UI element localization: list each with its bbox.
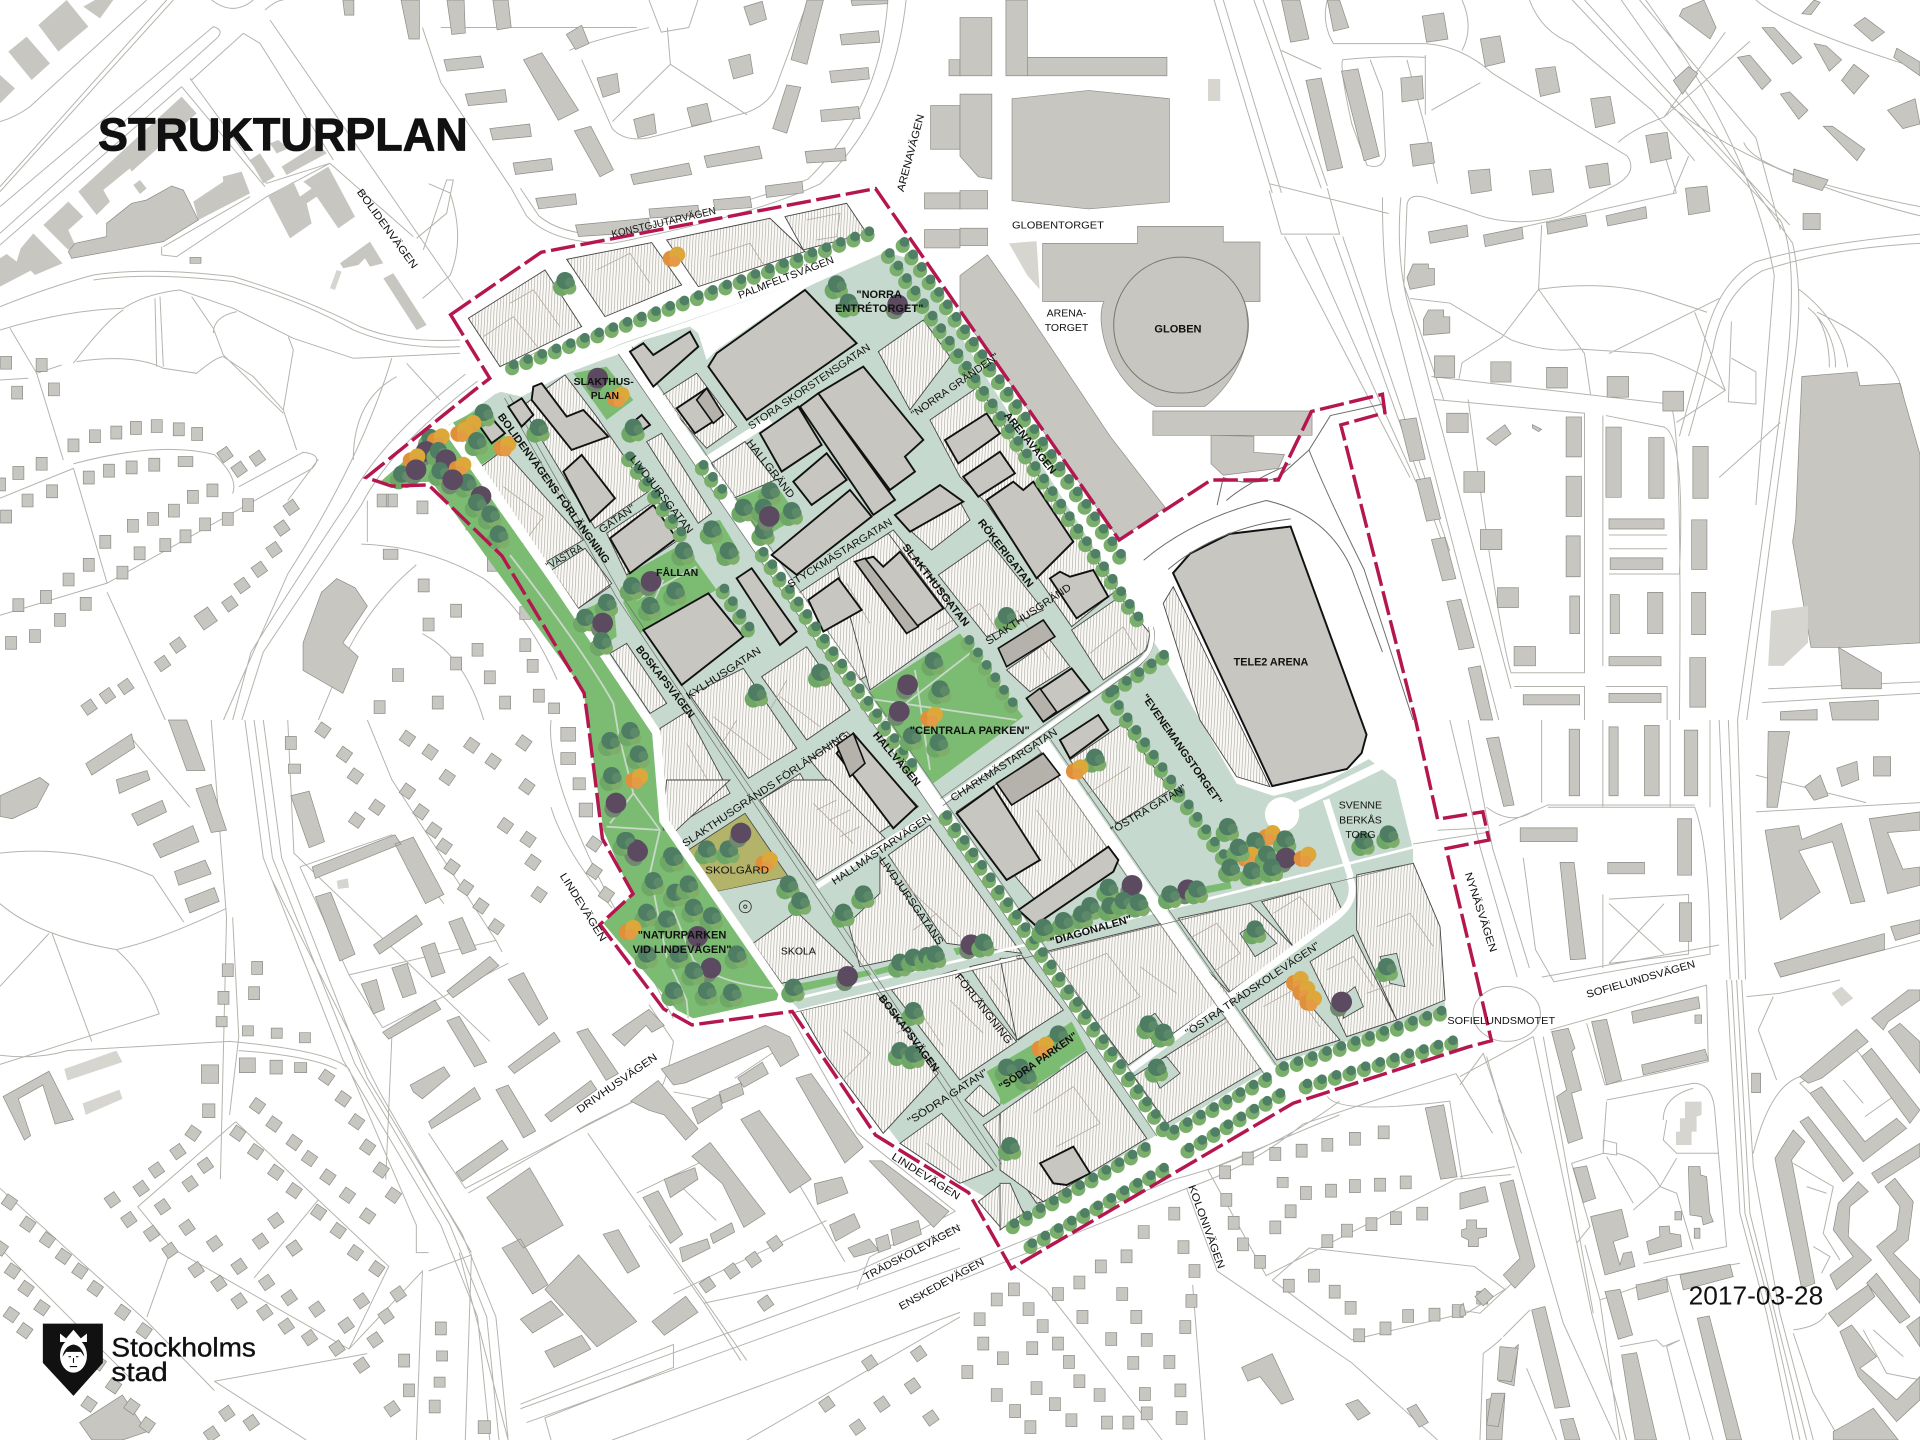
label: Norra Gränden: "NORRA GRÄNDEN" [909,351,1001,420]
label: Rökerigatan: RÖKERIGATAN [975,516,1036,590]
label: Östra Gatan: "ÖSTRA GATAN" [1109,782,1189,837]
label: Norra Entrétorget: "NORRA [856,289,902,301]
icon: city shield [43,1324,103,1396]
buildings: north-east quarter [960,0,1920,720]
label: Arenavägen: ARENAVÄGEN [1001,409,1059,477]
parks [378,367,1232,1105]
label: Kylhusgatan: KYLHUSGATAN [684,645,763,702]
label: Styckmästargatan: STYCKMÄSTARGATAN [785,516,895,591]
label: Slakthusgatan: SLAKTHUSGATAN [899,542,972,629]
label: Västra: "VÄSTRA [544,542,585,572]
label: Skola: SKOLA [781,945,816,957]
label: Naturparken vid Lindevägen: VID LINDEVÄGEN" [633,943,731,956]
label: Hallvägen: HALLVÄGEN [870,729,923,789]
label: Hallgränd: HALLGRÄND [744,437,797,501]
buildings: south-west quarter [0,720,949,1440]
logo: Stockholms stad [43,1324,256,1396]
buildings: bottom-right corner [1460,987,1920,1440]
label: Arenatorget: ARENA- [1047,307,1087,319]
label: Nynäsvägen: NYNÄSVÄGEN [1462,871,1499,954]
school yard [688,813,788,892]
label: Sofielundsmotet: SOFIELUNDSMOTET [1447,1015,1556,1027]
label: Sofielundsvägen: SOFIELUNDSVÄGEN [1585,958,1697,1001]
label: Norra Entrétorget: ENTRÉTORGET" [835,302,923,315]
label: Slakthusgränd: SLAKTHUSGRÄND [984,581,1074,648]
logo: Stockholms stad: stad [111,1357,168,1387]
tree avenues [512,231,1453,1254]
arena approach road lines [1144,404,1413,720]
label: Livdjursgatans: LIVDJURSGATANS [876,855,946,947]
label: Lindevägen west: LINDEVÄGEN [557,871,609,944]
park trees [390,247,1400,1161]
label: Diagonalen: "DIAGONALEN" [1049,913,1133,948]
label: Livdjursgatan: LIVDJURSGATAN [627,453,695,536]
label: Arenatorget: TORGET [1045,322,1089,334]
buildings: north-west quarter [0,0,427,330]
label: Bolidenvägen: BOLIDENVÄGEN [354,187,420,271]
label: Skolgård: SKOLGÅRD [705,864,769,877]
label: Svenne Berkås Torg: SVENNE [1339,800,1382,812]
label: Slakthusgränds förlängning: SLAKTHUSGRÄNDS FÖRLÄNGNING [680,730,850,850]
title: STRUKTURPLAN [98,109,468,161]
label: Trädskolevägen: TRÄDSKOLEVÄGEN [862,1222,963,1283]
label: Drivhusvägen: DRIVHUSVÄGEN [575,1051,660,1116]
label: Svenne Berkås Torg: TORG [1345,829,1376,841]
map labels [98,109,1823,1313]
label: Kolonivägen: KOLONIVÄGEN [1185,1183,1227,1270]
label: Södra parken: "SÖDRA PARKEN" [996,1029,1080,1093]
label: Tele2 Arena: TELE2 ARENA [1234,656,1308,668]
school square [717,877,793,942]
date stamp: 2017-03-28 [1689,1281,1823,1311]
label: Boskapsvägen north: BOSKAPSVÄGEN [633,643,698,720]
label: Enskedevägen: ENSKEDEVÄGEN [897,1256,986,1313]
label: Boskapsvägen south: BOSKAPSVÄGEN [876,992,942,1074]
hatched city blocks [468,203,1445,1230]
project boundary [366,189,1491,1269]
label: Östra Trädskolevägen: "ÖSTRA TRÄDSKOLEVÄGEN" [1183,940,1322,1039]
label: Fållan: FÅLLAN [656,566,698,579]
label: Arenavägen north: ARENAVÄGEN [895,113,927,193]
label: Bolidenvägens förlängning: BOLIDENVÄGENS FÖRLÄNGNING [495,411,613,566]
pale pocket squares [1140,922,1405,1088]
project area: streets, blocks, parks and buildings [378,203,1445,1230]
label: Globen: GLOBEN [1154,323,1202,335]
Tele2 Arena [1173,527,1367,786]
label: Stora Skorstensgatan: STORA SKORSTENSGATAN [746,342,873,432]
label: Palmfeltsvägen: PALMFELTSVÄGEN [737,254,836,302]
label: Södra Gatan: "SÖDRA GATAN" [905,1067,990,1128]
buildings: south-east quarter [962,726,1920,1440]
label: Centrala parken: "CENTRALA PARKEN" [910,725,1030,737]
white forecourt along Palmfeltsvägen [500,252,887,397]
white carriageways [449,347,1413,1167]
label: Lindevägen south: LINDEVÄGEN [889,1151,962,1203]
label: Gatan: GATAN" [597,502,638,536]
logo wordmark: Stockholms [111,1333,256,1363]
label: Slakthusplan: SLAKTHUS- [574,377,634,388]
label: Charkmästargatan: CHARKMÄSTARGATAN [948,726,1060,804]
paved streets and squares [456,252,1445,1216]
label: Slakthusplan: PLAN [591,391,619,402]
label: Hallmästarvägen: HALLMÄSTARVÄGEN [830,812,934,888]
label: Konstgjutarvägen: KONSTGJUTARVÄGEN [610,205,717,241]
label: Förlängning: FÖRLÄNGNING [952,972,1014,1046]
label: Naturparken vid Lindevägen: "NATURPARKEN [638,930,726,942]
park paths [510,555,1017,1018]
label: Svenne Berkås Torg: BERKÅS [1339,813,1382,826]
project buildings [480,290,1118,1185]
label: Globentorget: GLOBENTORGET [1012,219,1104,231]
label: Evenemangstorget: "EVENEMANGSTORGET" [1139,692,1224,807]
